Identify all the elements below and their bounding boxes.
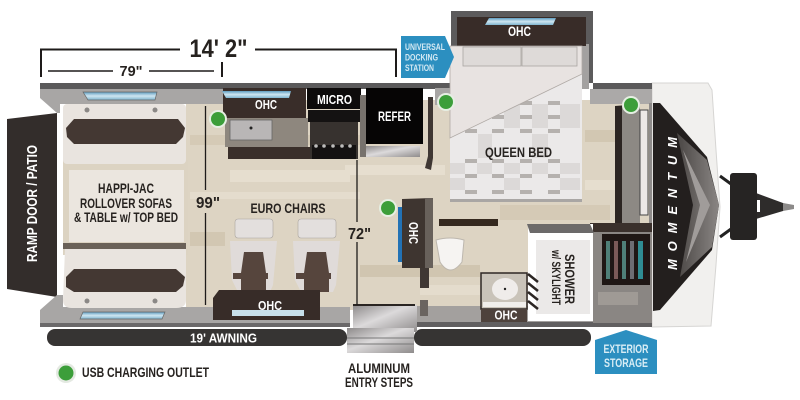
- USB outlet: kitchen: [209, 110, 227, 128]
- bathroom sink cabinet: [481, 273, 527, 322]
- microwave: [307, 88, 361, 109]
- main walls: [40, 83, 652, 327]
- ramp door / patio: RAMP DOOR / PATIO: [25, 145, 41, 262]
- trailer floor: [63, 100, 652, 310]
- shower with skylight: SHOWER: [562, 254, 577, 304]
- dimension 99": 99": [196, 195, 220, 212]
- awning left: [47, 329, 347, 346]
- USB outlet: bed left: [437, 93, 455, 111]
- bathroom overhead cabinet: OHC: [406, 222, 420, 244]
- exterior storage badge: [595, 330, 657, 374]
- euro chairs label: EURO CHAIRS: [250, 200, 326, 216]
- toilet: [436, 219, 498, 270]
- queen bed: [450, 46, 582, 202]
- front wardrobe counter: [615, 103, 652, 226]
- exterior storage badge: EXTERIOR: [604, 344, 649, 356]
- hitch: [720, 173, 794, 240]
- windows: [80, 92, 165, 319]
- aluminum entry steps: [345, 304, 417, 390]
- USB outlet: bath wall: [379, 199, 397, 217]
- kitchen overhead cabinet: OHC: [255, 97, 277, 112]
- bedroom slide-out: [451, 11, 593, 91]
- awning right: [414, 329, 591, 346]
- refrigerator: REFER: [378, 109, 411, 124]
- legend: USB charging outlet: [56, 363, 209, 383]
- refrigerator: [360, 88, 433, 170]
- stove: [308, 110, 360, 159]
- dimension 79": 79": [120, 63, 142, 80]
- kitchen overhead cabinet: [222, 88, 306, 118]
- aluminum entry steps: ALUMINUM: [348, 361, 410, 376]
- lower overhead cabinet: OHC: [258, 298, 283, 313]
- closet: [590, 223, 652, 323]
- universal docking station badge: [401, 36, 454, 78]
- universal docking station badge: DOCKING: [405, 52, 438, 62]
- kitchen sink counter: [225, 118, 310, 159]
- bathroom overhead cabinet: [398, 198, 433, 316]
- overall dimension 14' 2": 14' 2": [190, 35, 248, 63]
- brand logo: MOMENTUM: [665, 136, 680, 270]
- table with top bed label: ROLLOVER SOFAS: [80, 195, 172, 211]
- rollover sofa: top: [63, 104, 186, 164]
- shower with skylight: w/ SKYLIGHT: [549, 249, 563, 305]
- queen bed: QUEEN BED: [485, 144, 552, 160]
- shower with skylight: [527, 224, 594, 321]
- lower overhead cabinet: [213, 290, 320, 320]
- bedroom slide-out: OHC: [508, 24, 531, 39]
- table with top bed label: [63, 170, 186, 249]
- front cap: [652, 83, 720, 327]
- overall dimension 14' 2": [41, 35, 396, 77]
- awning left: 19' AWNING: [190, 330, 257, 346]
- universal docking station badge: UNIVERSAL: [405, 42, 445, 52]
- exterior storage badge: STORAGE: [604, 358, 648, 370]
- USB outlet: bed right: [622, 96, 640, 114]
- aluminum entry steps: ENTRY STEPS: [345, 375, 413, 390]
- ramp door / patio: [7, 113, 57, 297]
- rollover sofa: bottom: [63, 249, 186, 308]
- table with top bed label: HAPPI-JAC: [98, 180, 154, 196]
- microwave: MICRO: [317, 93, 352, 107]
- euro chair right: [293, 219, 340, 292]
- dimension 72": 72": [348, 226, 371, 243]
- bathroom sink cabinet: OHC: [494, 308, 518, 322]
- legend: USB charging outlet: USB CHARGING OUTLET: [82, 364, 209, 380]
- universal docking station badge: STATION: [405, 63, 434, 73]
- euro chair left: [230, 219, 277, 292]
- table with top bed label: & TABLE w/ TOP BED: [74, 209, 178, 225]
